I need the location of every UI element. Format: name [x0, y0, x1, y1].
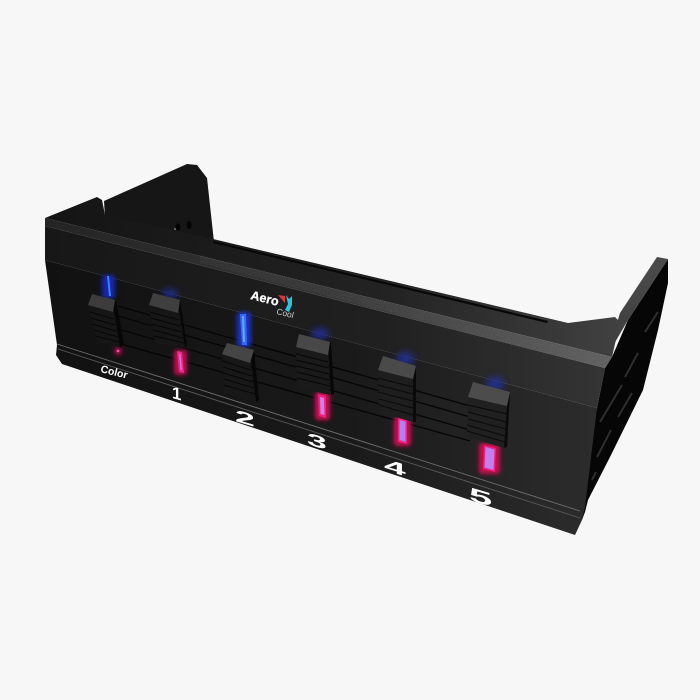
- right side wing: [575, 257, 668, 520]
- LED: channel 2 blue: [237, 312, 251, 347]
- label: 1: 1: [172, 382, 182, 405]
- slider: 4: [378, 356, 416, 422]
- slider slot lines: [110, 306, 470, 441]
- brand logo: Cool: [276, 306, 295, 320]
- lower front face: [45, 260, 597, 535]
- chamfer band: [45, 218, 612, 368]
- label: 2: 2: [235, 406, 255, 431]
- blue glows behind sliders: [162, 289, 504, 391]
- slider: 3: [296, 334, 334, 395]
- brand logo: Aero: [249, 288, 281, 309]
- slider: 2: [222, 343, 259, 402]
- LED: channel 1 pink: [174, 350, 187, 375]
- label: 3: 3: [307, 429, 327, 454]
- rear left bracket: [104, 164, 214, 242]
- LED: channel 5 pink: [479, 443, 500, 474]
- upper front face: [45, 226, 605, 408]
- label: 5: 5: [469, 484, 492, 511]
- label: Color: Color: [99, 363, 129, 382]
- slider: color: [88, 294, 124, 348]
- bottom strip lines: [57, 344, 580, 518]
- label: 4: 4: [384, 455, 407, 481]
- brand logo: [249, 288, 295, 320]
- top surface: [45, 197, 620, 357]
- LED: color pink dot: [114, 346, 122, 356]
- LED: color blue: [102, 275, 115, 299]
- slider: 5: [467, 382, 510, 448]
- LED: channel 4 pink: [394, 417, 411, 446]
- slider: 1: [149, 293, 187, 348]
- LED: channel 3 pink: [315, 392, 330, 420]
